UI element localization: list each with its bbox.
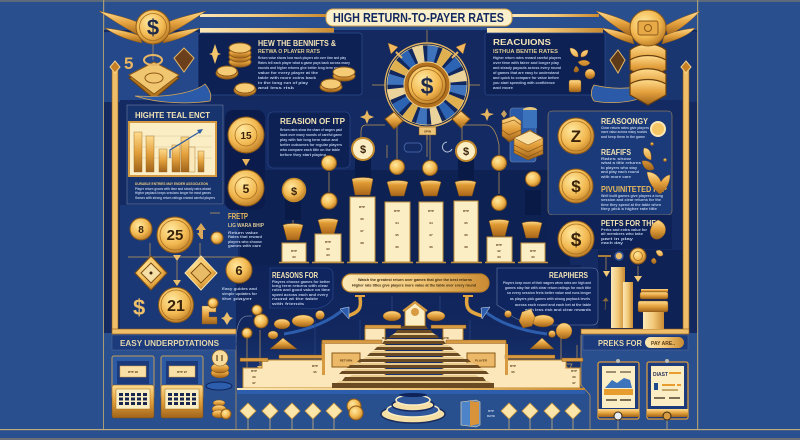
stepped platforms: 97 [572,381,576,385]
panel: reason of RTP: before they start playing [280,153,326,157]
diamonds [135,255,258,301]
podium column labels: 92 [497,249,501,253]
stepped platforms: RTP [571,369,577,373]
roulette wheel: $ [421,73,434,99]
panel: reapihers: games stay fair with clear return ratings for each title [505,286,591,290]
keypad machine 1: RTP 96 [128,370,138,374]
text: fretp block: FRETP [228,212,248,221]
panel: reason of RTP: Return rates show the share of wagers paid [280,128,342,132]
coins top row: 8 [138,225,144,236]
blue swoosh plinth left [135,84,211,103]
panel: benefits: and less risk [258,86,294,90]
arrows into banner [284,296,547,385]
lower right bars and pillar [598,248,668,329]
panel: higher total chart: Player return grows with time and steady rates ahead [135,187,211,191]
podium column labels: RTP [359,205,365,209]
bottom coin 21 and dollar [133,288,233,325]
panel: reasons for: spent across each and every [272,293,328,297]
small coins above cups [282,135,541,220]
icon: coin stacks [209,43,355,96]
icon: glowing coin [651,122,665,136]
panel: reapihers: Players keep more of their wagers when rates are high and [503,281,591,285]
text: fretp block: Rates that reward [228,235,262,239]
panel: reasoning top right: of games that are easy to understand [493,71,559,75]
callout banner: Watch the greatest return over games that give the best returns [358,278,472,282]
podium columns [279,197,548,262]
icon: blue box: RATE [487,414,495,418]
panel: coin column: 5 [243,182,250,196]
panel: reapihers: with less risk and clear rewards [524,308,591,312]
icon: gold bricks with blue panel [502,107,543,162]
panel: reasons right column: Clear return rates give players [601,126,649,130]
keypad machine 2: RTP 97 [177,370,187,374]
panel: reasons right column: each day [601,241,623,245]
podium column labels: 95 [395,233,399,237]
roulette wheel [372,30,480,140]
panel: coin column: 15 [240,131,252,142]
tablet 2 [647,359,688,429]
podium column labels: 96 [429,245,433,249]
panel: reasons right column: REAFIFS [601,148,632,157]
heading: easy understanding [112,335,236,350]
bottom navy band [237,394,581,429]
panel: benefits: in the long run of play [258,81,308,85]
panel: reasons right column: part in play [601,237,633,241]
text: fretp block: games with care [228,244,261,248]
panel: reasons right column: to players who stay [601,166,637,170]
podium column labels: 93 [497,255,501,259]
panel: reason of RTP: who compare each title on the table [279,148,340,152]
icon: coin cluster [347,399,363,420]
podium column labels: 97 [429,233,433,237]
icon: money stack and badge: 5 [124,54,133,73]
small coins above cups: $ [291,186,297,198]
panel: reasoning top right: ISTHUA BENTIE RATES [493,49,559,55]
bottom coin 21 and dollar: $ [133,295,145,320]
panel: reasoning top right: and quick to compare for value before [493,76,559,80]
stepped platforms: 95 [313,370,317,374]
panel: reasons for: Players choose games for better [272,280,331,284]
podium column labels: 97 [360,229,364,233]
stepped platforms: RTP [312,364,318,368]
icon: gold leaves [569,48,595,92]
panel: reapihers [497,268,598,325]
stepped platforms: 97 [252,381,256,385]
connectors [293,125,499,230]
panel: reasoning top right: and more [493,86,513,90]
podium column labels: 92 [326,247,330,251]
roulette wheel: SPIN [424,130,431,134]
panel: reason of RTP: REASION OF ITP [280,117,346,126]
stepped platforms: RETURN [340,358,352,362]
icon: gold plant [642,142,670,264]
panel: reasons right column [548,111,672,264]
callout banner [342,274,489,292]
podium column labels: 90 [531,255,535,259]
podium column labels: 96 [395,245,399,249]
panel: reasons for: REASONS FOR [272,271,318,280]
icon: money stack and badge [124,44,194,99]
podium column labels: 98 [360,241,364,245]
panel: reasons for: round at the table [272,297,318,301]
heading: easy understanding: EASY UNDERPDTATIONS [120,338,219,348]
diamonds: the player [222,297,253,301]
panel: reasons right column: they pick a higher rate title [601,207,657,211]
panel: reasons right column: and play each round [601,170,639,174]
icon: blue box: RTP [488,409,494,413]
lower left area [128,212,265,325]
podium column labels [291,205,536,259]
panel: benefits: RETWA O PLAYER RATS [258,49,321,55]
panel: benefits: HEW THE BENNIFTS & [258,39,336,48]
diamonds: 6 [235,263,243,278]
panel: reasons right column: $ [571,230,582,251]
gold tokens around stairs [268,309,572,349]
panel: reapihers: so every session feels better value and runs longer [507,291,592,295]
podium column labels: RTP [291,249,297,253]
panel: reasons right column: session and clear returns for the [601,198,661,202]
stepped platforms: RTP [510,364,516,368]
left token group [236,305,590,429]
right wing emblem and shield stack [596,10,700,105]
panel: reasons right column: Perks and extra value for [601,228,648,232]
bar chart [129,122,216,176]
podium column labels: RTP [496,243,502,247]
panel: higher total chart: HIGHTE TEAL ENCT [135,111,210,120]
panel: reasons for [270,268,333,309]
keypad machine 2 [161,356,203,418]
panel: reasons right column: and keep them in the game [601,135,645,139]
text: fretp block: Return value [228,231,258,235]
panel: reasoning top right: you start spending with confidence [493,81,555,85]
panel: reasons right column: more value across many rounds [601,130,647,134]
coins top row [130,217,223,253]
text: fretp block: LIG WARA BHIP [228,223,265,229]
panel: reasons right column: Z [571,127,581,146]
blue swoosh plinth right [591,85,644,103]
panel: reasons right column: PETFS FOR THE [601,219,657,228]
panel: reason of RTP [268,112,350,168]
panel: reasons right column: what a title returns [600,161,641,165]
panel: reasons right column: Rates show [601,157,632,161]
panel: reasons right column: REASOONGY [601,117,649,126]
heading: perks: PAY ARE.. [651,341,675,347]
panel: reasons right column: time they spend at the table when [601,203,661,207]
stepped platforms: RATE [382,336,390,340]
tablet 2: DIAST [653,372,668,378]
podium column labels: 93 [326,253,330,257]
heading: perks [583,335,688,350]
panel: reasoning top right: REACUIONS [493,38,552,47]
panel: coin column [225,110,265,210]
lower bands [104,333,236,429]
podium column labels: 94 [429,221,433,225]
panel: reason of RTP: back over many rounds of careful game [280,133,342,137]
panel: benefits: Return value shows how much players win over time and play [258,56,346,60]
panel: reasons right column: Well built games give players a long [601,194,663,198]
icon: diamond badge right [610,50,625,73]
panel: reapihers: as players pick games with strong payback levels [510,297,590,301]
base strip [237,388,585,390]
podium column labels: 96 [464,233,468,237]
panel: benefits: rounds and higher returns give better long term session [258,66,346,70]
podium column labels: RTP [530,249,536,253]
icon: blue box [461,400,495,427]
panel: reasoning top right: Higher return rates reward careful players [493,56,561,60]
podium column labels: 95 [464,221,468,225]
podium column labels: 90 [292,255,296,259]
icon: coin stack and disc [206,350,232,419]
panel: reason of RTP: play with fair long term value and [280,138,338,142]
panel: reasoning top right: over time with fairer and longer play [493,61,559,65]
panel: higher total chart: Games with strong return ratings reward careful players [135,196,215,200]
stacked disc pedestal [381,393,445,423]
stepped platforms: PLAYER [475,358,488,362]
stepped platforms: 96 [252,375,256,379]
panel: reasoning top right: and steady payouts across every round [493,66,561,70]
podium column labels: 96 [360,217,364,221]
gold outer frame [110,14,691,334]
panel: reasons for: long term returns with clear [272,284,329,288]
panel: reapihers: across each round and each bet at the table [515,303,591,307]
panel: higher total chart: DURABLE ENTRIES MAY ENDER ASSOCIATION [135,182,209,186]
panel: reasoning top right [485,33,605,95]
panel: benefits: value for every player at the [258,71,318,75]
diamonds: Easy guides and [222,287,257,291]
panel: reapihers: REAPIHERS [549,271,589,280]
staircase [332,326,494,388]
podium column labels: RTP [428,209,434,213]
podium column labels: RTP [394,209,400,213]
left wing emblem: $ [147,15,159,40]
coins top row: 25 [167,227,183,244]
panel: reasons right column: $ [571,177,581,196]
panel: benefits [198,33,362,96]
stepped platforms: 95 [511,370,515,374]
panel: reasons right column: with more care [600,175,631,179]
panel: reasons right column: PIVUINITETED FLP [601,185,668,194]
panel: reasons for: rules and good value on time [272,288,330,292]
stepped platforms: 96 [572,375,576,379]
stepped platforms [240,325,583,388]
panel: benefits: table with more coins back [258,76,316,80]
diamonds: simple updates for [222,292,258,296]
main navy field [104,30,697,336]
panel: reasons right column: all members who take [601,232,643,236]
title banner: HIGH RETURN-TO-PAYER RATES [333,11,504,25]
left wing emblem [99,10,206,44]
podium column labels: RTP [463,209,469,213]
panel: higher total chart: Higher payback keeps sessions longer for most games [135,191,211,195]
podium cups [283,178,542,240]
keypad machine 1 [112,356,154,418]
stepped platforms: RATE [441,336,449,340]
panel: reason of RTP: better outcomes for regular players [280,143,342,147]
heading: perks: PREKS FOR [598,338,642,348]
tablet 1 [598,359,639,429]
panel: benefits: Rates tell each player what a game pays back across many [258,61,350,65]
panel: reasons for: with friends [270,302,304,306]
callout banner: Higher rate titles give players more value at the table over every round [352,284,477,288]
bottom coin 21 and dollar: 21 [167,298,185,315]
house at top of stairs [403,302,427,326]
text: fretp block: players who choose [228,240,262,244]
podium column labels: RTP [325,240,331,244]
panel: higher total chart [127,105,223,204]
small coins above cups: $ [463,146,469,158]
text: fretp block [228,212,265,248]
stepped platforms: RTP [251,369,257,373]
podium column labels: 98 [464,245,468,249]
podium column labels: 94 [395,221,399,225]
row of diamond markers [240,403,581,429]
small coins above cups: $ [360,144,366,156]
